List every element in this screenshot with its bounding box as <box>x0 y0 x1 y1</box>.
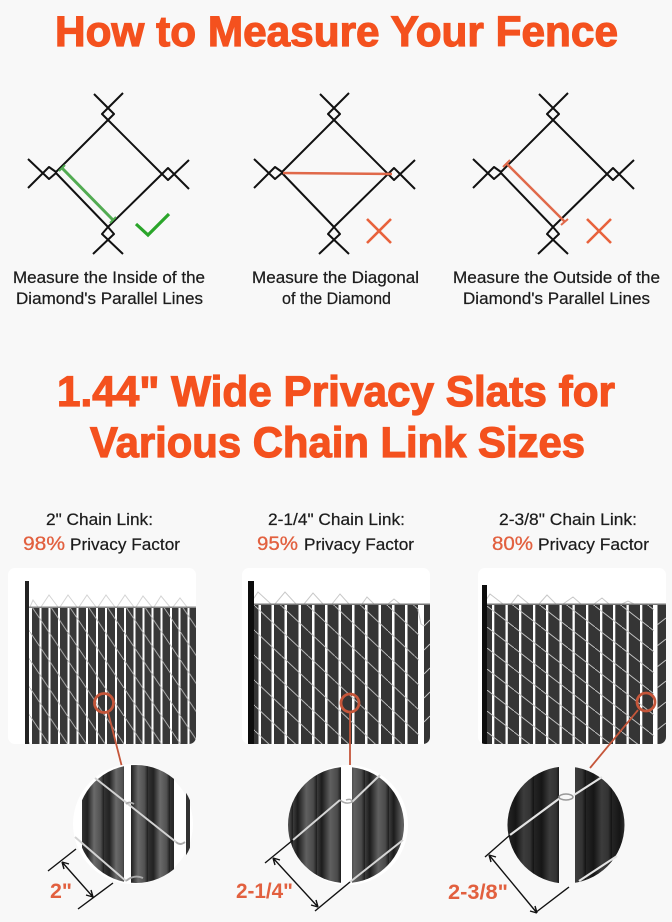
heading: privacy slats: Various Chain Link Sizes <box>90 419 585 467</box>
diagram: chain link diamond, diagonal measurement <box>254 93 415 254</box>
label: 2-3/8 inch privacy factor: Privacy Factor <box>538 536 650 554</box>
caption: inside: Measure the Inside of the <box>13 269 205 287</box>
magnified view: 2-1/4 inch <box>288 767 404 883</box>
caption: outside: Measure the Outside of the <box>453 269 660 287</box>
label: 2-1/4 inch privacy factor: Privacy Factor <box>304 536 415 554</box>
label: 2-3/8 inch privacy factor: 2-3/8" Chain Link: <box>499 511 637 529</box>
label: 2-3/8 inch privacy factor: 80% <box>492 534 533 555</box>
label: 2-1/4 inch privacy factor <box>257 511 415 555</box>
panel: measure the diagonal (wrong) <box>252 93 419 308</box>
highlight circle and leader <box>590 693 655 768</box>
caption: outside <box>453 269 660 308</box>
icon: red cross <box>587 219 611 243</box>
panel: measure the outside (wrong) <box>453 93 660 308</box>
dimension: 2-1/4 inch <box>236 840 350 911</box>
caption: inside: Diamond's Parallel Lines <box>16 290 203 308</box>
label: 2 inch privacy factor: 98% <box>23 534 65 555</box>
title: how to measure: How to Measure Your Fence <box>55 8 618 56</box>
label: 2 inch privacy factor <box>23 511 181 555</box>
icon: red cross <box>367 219 391 243</box>
caption: diagonal: of the Diamond <box>282 290 391 308</box>
magnified view: 2-3/8 inch <box>508 767 624 883</box>
caption: inside <box>13 269 205 308</box>
photo: fence with slats, 2-1/4 inch <box>242 568 430 765</box>
dimension: 2-1/4 inch: 2-1/4" <box>236 880 293 903</box>
photo: fence with slats, 2-3/8 inch <box>478 568 666 768</box>
dimension: 2 inch: 2" <box>50 880 72 903</box>
diagram: chain link diamond, outside measurement <box>473 93 634 254</box>
highlight circle and leader <box>341 694 359 765</box>
icon: green check mark <box>136 214 169 235</box>
caption: diagonal <box>252 269 419 308</box>
caption: outside: Diamond's Parallel Lines <box>463 290 650 308</box>
label: 2-3/8 inch privacy factor <box>492 511 650 555</box>
highlight circle and leader <box>94 694 122 767</box>
dimension: 2 inch <box>48 849 113 909</box>
panel: measure the inside (correct) <box>13 93 205 308</box>
label: 2-1/4 inch privacy factor: 2-1/4" Chain Link: <box>268 511 405 529</box>
magnified view: 2 inch <box>74 765 190 883</box>
column: 2 inch chain link <box>8 511 196 909</box>
column: 2-3/8 inch chain link <box>448 511 666 913</box>
dimension: 2-3/8 inch: 2-3/8" <box>448 881 508 904</box>
column: 2-1/4 inch chain link <box>236 511 430 911</box>
caption: diagonal: Measure the Diagonal <box>252 269 419 287</box>
label: 2-1/4 inch privacy factor: 95% <box>257 534 298 555</box>
photo: fence with slats, 2 inch <box>25 581 196 766</box>
label: 2 inch privacy factor: 2" Chain Link: <box>46 511 153 529</box>
dimension: 2-3/8 inch <box>448 835 569 913</box>
heading: privacy slats <box>57 368 615 467</box>
label: 2 inch privacy factor: Privacy Factor <box>70 536 181 554</box>
diagram: chain link diamond, inside measurement <box>28 93 189 254</box>
heading: privacy slats: 1.44" Wide Privacy Slats for <box>57 368 615 416</box>
